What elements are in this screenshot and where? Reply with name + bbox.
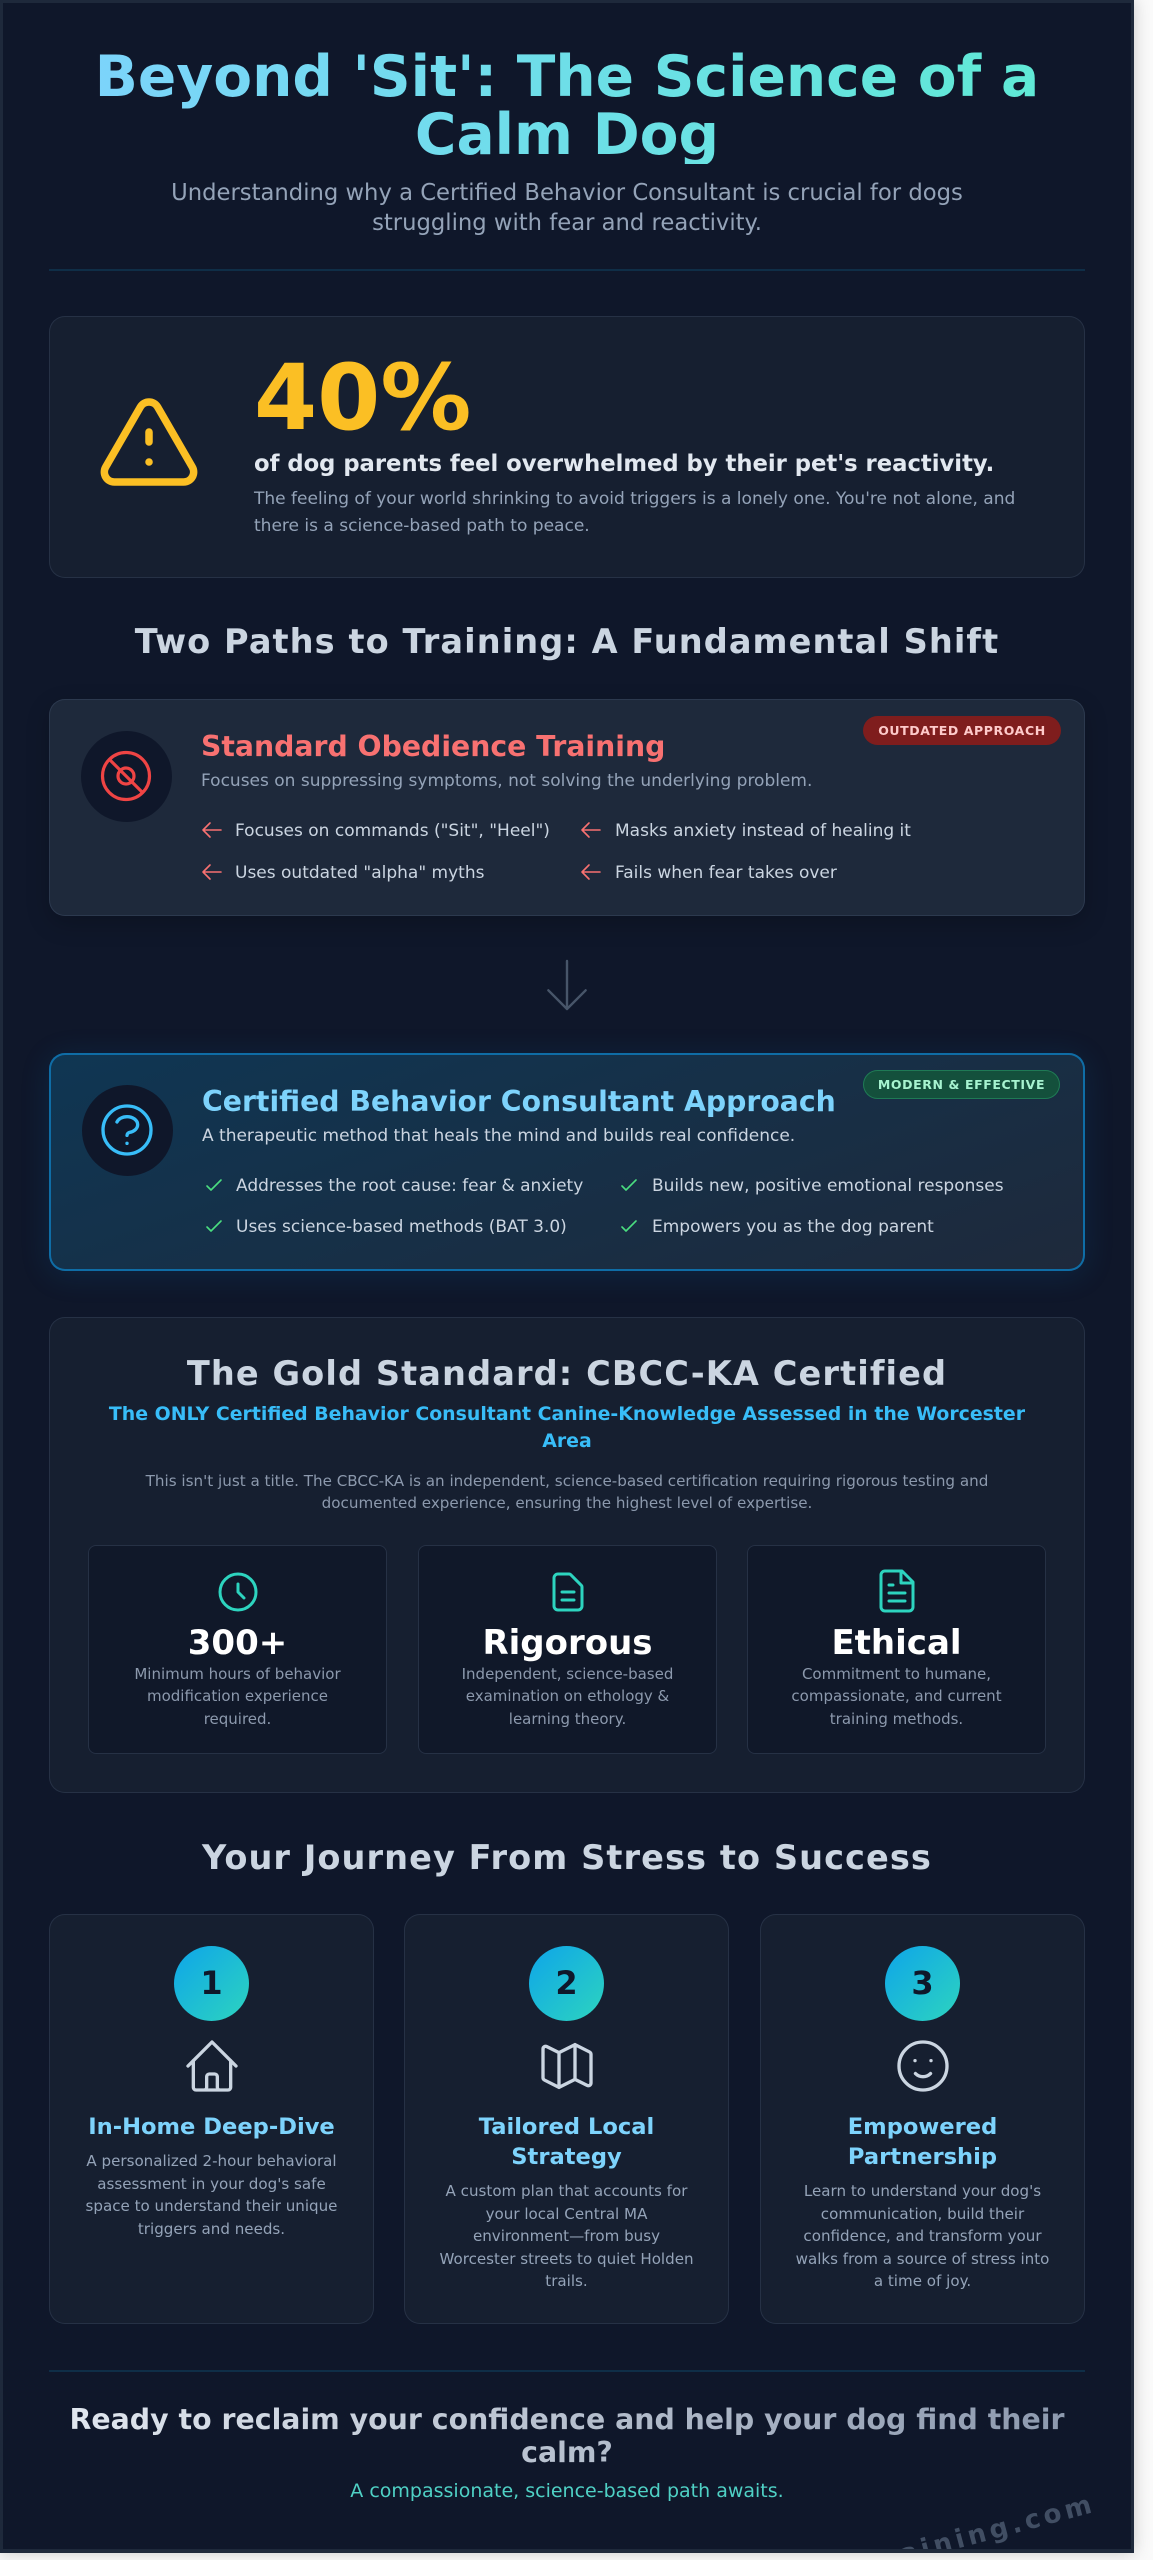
- section text: [146, 1472, 988, 1512]
- step title: Strategy: [511, 2144, 622, 2170]
- panel: 40% statistic: [49, 316, 1085, 578]
- section subheading: Area: [542, 1430, 592, 1452]
- step text: A personalized 2-hour behavioral: [86, 2152, 337, 2170]
- heading: two paths: Two Paths to Training: A Fundamental Shift: [135, 622, 999, 661]
- step card 2: [404, 1914, 729, 2324]
- icon: map: [541, 2042, 593, 2090]
- icon: document with lines: [880, 1570, 914, 1612]
- badge: outdated approach: OUTDATED APPROACH: [878, 723, 1046, 738]
- statistic text: The feeling of your world shrinking to avoid triggers is a lonely one. You're not alone, and: [254, 489, 1015, 509]
- step text: [439, 2182, 694, 2290]
- description: [791, 1665, 1002, 1728]
- credential card: rigorous: [418, 1545, 717, 1754]
- step text: a time of joy.: [874, 2272, 971, 2290]
- step text: [796, 2182, 1049, 2290]
- list item: Builds new, positive emotional responses: [652, 1176, 1004, 1196]
- step text: [86, 2152, 337, 2238]
- list item: Addresses the root cause: fear & anxiety: [236, 1176, 583, 1196]
- badge: outdated approach: [863, 716, 1061, 745]
- number badge: 2: [555, 1964, 578, 2002]
- label: 300+: [188, 1623, 287, 1663]
- description: compassionate, and current: [791, 1687, 1002, 1705]
- section heading: The Gold Standard: CBCC-KA Certified: [187, 1354, 947, 1393]
- credential card: ethical: [747, 1545, 1046, 1754]
- card description: Focuses on suppressing symptoms, not solving the underlying problem.: [201, 771, 812, 791]
- statistic text: there is a science-based path to peace.: [254, 516, 590, 536]
- section subheading: The ONLY Certified Behavior Consultant Canine-Knowledge Assessed in the Worcester: [109, 1403, 1025, 1425]
- step text: communication, build their: [821, 2205, 1024, 2223]
- step text: trails.: [545, 2272, 588, 2290]
- title: [49, 49, 1085, 164]
- statistic headline: of dog parents feel overwhelmed by their pet's reactivity.: [254, 451, 994, 477]
- badge: modern and effective: MODERN & EFFECTIVE: [878, 1077, 1045, 1092]
- step text: your local Central MA: [486, 2205, 647, 2223]
- icon: warning triangle: [100, 398, 198, 486]
- arrow: down: [547, 960, 587, 1010]
- panel: gold standard: [49, 1317, 1085, 1793]
- statistic text: [254, 489, 1015, 536]
- step text: confidence, and transform your: [803, 2227, 1042, 2245]
- description: training methods.: [830, 1710, 963, 1728]
- step title: [478, 2114, 654, 2170]
- list item: Masks anxiety instead of healing it: [615, 820, 911, 840]
- list item: Fails when fear takes over: [615, 862, 837, 882]
- number badge: 3: [911, 1964, 934, 2002]
- list item: Uses outdated "alpha" myths: [235, 862, 484, 882]
- card title: Standard Obedience Training: [201, 730, 665, 763]
- description: Commitment to humane,: [802, 1665, 991, 1683]
- footer call to action: Ready to reclaim your confidence and help your dog find their: [70, 2402, 1064, 2436]
- step text: A custom plan that accounts for: [446, 2182, 687, 2200]
- step text: triggers and needs.: [138, 2220, 285, 2238]
- footer call to action: calm?: [521, 2436, 613, 2468]
- title: Beyond 'Sit': The Science of a: [95, 44, 1039, 110]
- subtitle: struggling with fear and reactivity.: [372, 210, 762, 236]
- card description: A therapeutic method that heals the mind and builds real confidence.: [202, 1126, 795, 1146]
- step title: Tailored Local: [479, 2114, 654, 2140]
- section text: This isn't just a title. The CBCC-KA is an independent, science-based certification requiring rigorous testing and: [146, 1472, 988, 1490]
- footer call to action: [49, 2402, 1085, 2468]
- list item: Empowers you as the dog parent: [652, 1217, 934, 1237]
- panel: certified behavior consultant: [49, 1053, 1085, 1271]
- description: required.: [204, 1710, 271, 1728]
- number badge: [885, 1946, 960, 2020]
- step title: [848, 2114, 997, 2170]
- step title: Partnership: [848, 2144, 997, 2170]
- card title: Certified Behavior Consultant Approach: [202, 1085, 836, 1118]
- icon: prohibited: [80, 730, 172, 822]
- step text: Worcester streets to quiet Holden: [439, 2250, 694, 2268]
- description: [134, 1665, 341, 1728]
- step title: In-Home Deep-Dive: [88, 2114, 335, 2140]
- step card 3: [760, 1914, 1085, 2324]
- title: Calm Dog: [415, 102, 719, 168]
- description: learning theory.: [509, 1710, 626, 1728]
- icon: clock: [218, 1572, 258, 1612]
- label: Ethical: [831, 1623, 962, 1663]
- step title: Empowered: [848, 2114, 997, 2140]
- icon: question mark: [82, 1084, 172, 1176]
- step text: Learn to understand your dog's: [804, 2182, 1041, 2200]
- label: Rigorous: [482, 1623, 653, 1663]
- section subheading: [108, 1403, 1025, 1452]
- step text: environment—from busy: [473, 2227, 660, 2245]
- description: Minimum hours of behavior: [134, 1665, 341, 1683]
- number badge: [529, 1946, 604, 2020]
- description: modification experience: [147, 1687, 328, 1705]
- step text: walks from a source of stress into: [796, 2250, 1049, 2268]
- step text: assessment in your dog's safe: [97, 2175, 326, 2193]
- description: Independent, science-based: [462, 1665, 673, 1683]
- credential card: 300+: [88, 1545, 387, 1754]
- list item: Uses science-based methods (BAT 3.0): [236, 1217, 567, 1237]
- badge: modern and effective: [863, 1070, 1060, 1099]
- subtitle: Understanding why a Certified Behavior Consultant is crucial for dogs: [171, 180, 963, 206]
- panel: standard obedience training: [49, 699, 1085, 916]
- description: examination on ethology &: [466, 1687, 669, 1705]
- heading: journey: Your Journey From Stress to Success: [202, 1838, 932, 1877]
- subtitle: [171, 180, 963, 236]
- icon: document: [552, 1572, 584, 1612]
- description: [462, 1665, 673, 1728]
- footer tagline: A compassionate, science-based path awaits.: [350, 2480, 784, 2502]
- number badge: [174, 1946, 249, 2020]
- icon: smile: [897, 2040, 949, 2092]
- step card 1: [49, 1914, 374, 2324]
- number badge: 1: [200, 1964, 223, 2002]
- section text: documented experience, ensuring the highest level of expertise.: [322, 1494, 812, 1512]
- icon: house: [186, 2040, 238, 2092]
- list item: Focuses on commands ("Sit", "Heel"): [235, 820, 550, 840]
- big number: 40%: [254, 346, 471, 451]
- step text: space to understand their unique: [86, 2197, 337, 2215]
